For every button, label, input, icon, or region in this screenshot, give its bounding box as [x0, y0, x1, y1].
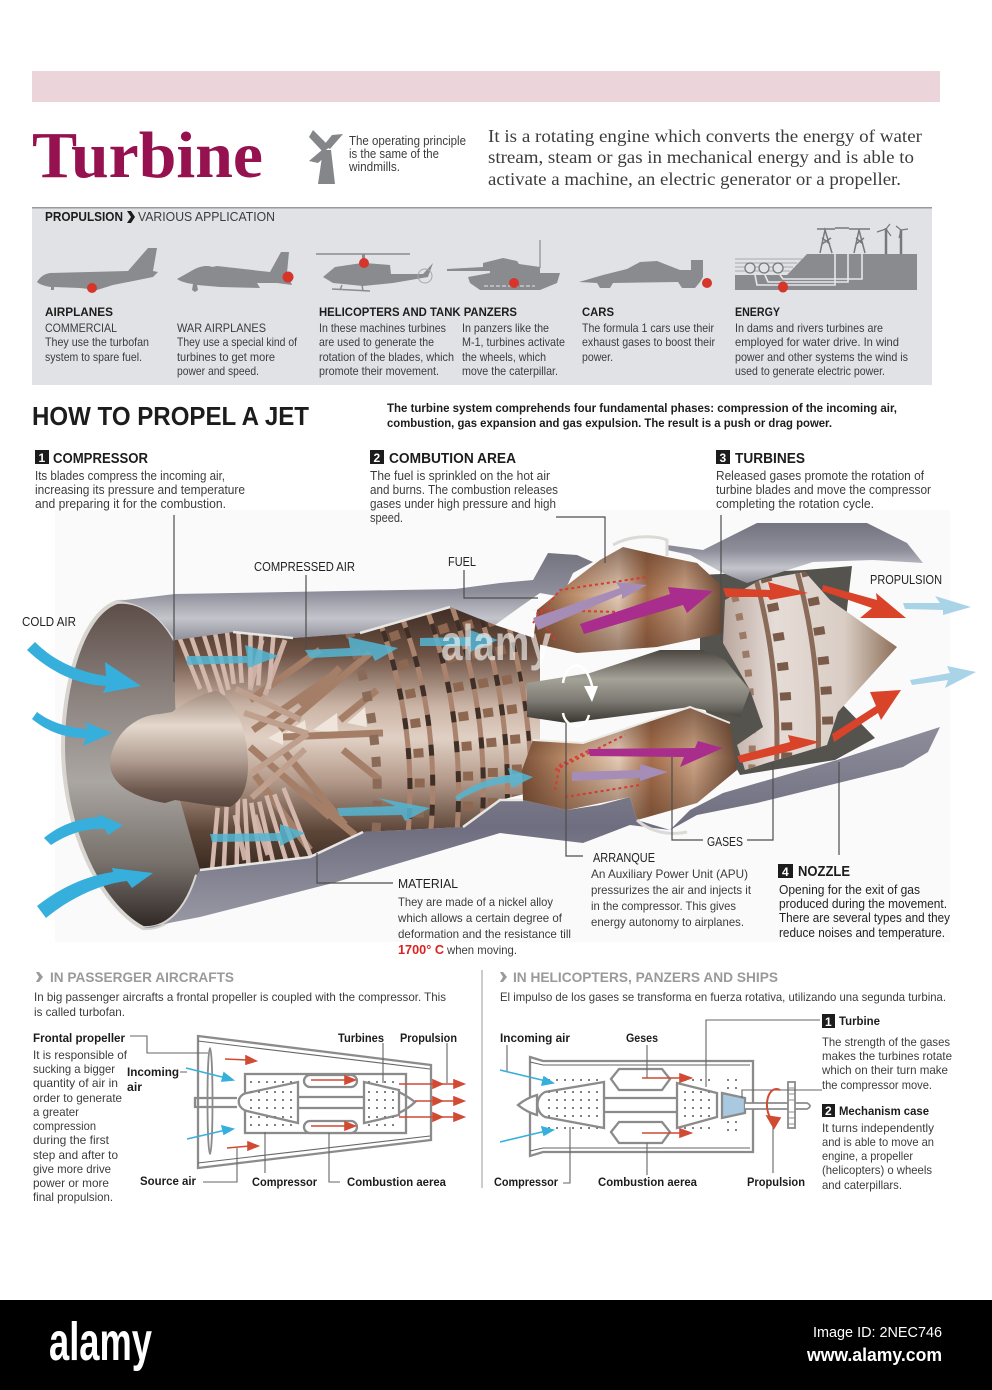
text: arranque: ARRANQUE [593, 851, 655, 865]
note 2: mechanism case: and is able to move an [822, 1135, 934, 1149]
compressor interior [175, 607, 540, 870]
panel heading [45, 209, 275, 224]
text: airplanes: COMMERCIAL [45, 321, 117, 335]
cut edge highlights [200, 607, 523, 870]
website: www.alamy.com [806, 1345, 942, 1365]
red dotted flames [533, 577, 647, 797]
label: incoming air: Incoming [127, 1065, 179, 1079]
icon: race car [579, 260, 712, 288]
blue air arrows [27, 642, 153, 918]
windmill note [348, 134, 466, 174]
step 1: compressor: increasing its pressure and temperature [35, 482, 245, 497]
front shell top [117, 553, 593, 640]
label: fuel: FUEL [448, 555, 476, 569]
note 1: turbine: the compressor move. [822, 1078, 932, 1092]
panel: propulsion applications [32, 207, 932, 385]
rear cone [723, 572, 897, 770]
text: cars: CARS [582, 305, 614, 319]
note 1: turbine: makes the turbines rotate [822, 1049, 952, 1063]
pale purple arrows [533, 582, 668, 781]
step 4: nozzle: Opening for the exit of gas [779, 882, 920, 897]
text: arranque: energy autonomy to airplanes. [591, 915, 744, 929]
note 2: mechanism case: engine, a propeller [822, 1149, 913, 1163]
icon: war plane [177, 252, 294, 292]
leaders [130, 1036, 447, 1182]
engine illustration [27, 509, 976, 942]
central shaft [527, 650, 750, 723]
text: airplanes: They use the turbofan [45, 335, 149, 349]
step 1: compressor [35, 450, 245, 511]
note 2: mechanism case [822, 1104, 934, 1192]
footer logo: alamy [49, 1312, 152, 1372]
rotation arrow [563, 665, 598, 726]
label: gases: GASES [707, 835, 743, 849]
text: turboshaft intro: El impulso de los gases se transforma en fuerza rotativa, utilizando una segunda turbina. [500, 990, 946, 1004]
step 2: combustion area [370, 450, 558, 525]
step 1: compressor: 1 [38, 451, 46, 465]
text: energy: In dams and rivers turbines are [735, 321, 883, 335]
vertical divider [481, 970, 483, 1188]
text: frontal propeller: compression [33, 1119, 96, 1133]
note 2: mechanism case: 2 [825, 1104, 832, 1118]
label: compressed air: COMPRESSED AIR [254, 560, 355, 574]
text: frontal propeller: a greater [33, 1105, 79, 1119]
text: helicopters and tank panzers: move the caterpillar. [462, 364, 558, 378]
label: combustion area: Combustion aerea [598, 1175, 697, 1189]
label: geses: Geses [626, 1031, 658, 1045]
note 1: turbine: Turbine [839, 1014, 880, 1028]
combustion chamber top [533, 547, 723, 653]
text: cars [582, 305, 715, 364]
compressor air arrows [187, 630, 533, 846]
text: frontal propeller: power or more [33, 1176, 109, 1190]
step 4: nozzle: 4 [782, 865, 789, 879]
icon: helicopter [316, 254, 433, 291]
text: frontal propeller [33, 1031, 128, 1204]
icon: windmill [309, 130, 343, 184]
panel heading: VARIOUS APPLICATION [138, 209, 275, 224]
step 2: combustion area: speed. [370, 510, 403, 525]
front shell bottom [143, 727, 940, 928]
panel heading: PROPULSION [45, 209, 123, 224]
label: compressor: Compressor [252, 1175, 317, 1189]
text: war airplanes: They use a special kind of [177, 335, 298, 349]
step 2: combustion area: and burns. The combustion releases [370, 482, 558, 497]
text: frontal propeller: during the first [33, 1133, 110, 1147]
step 3: turbines: Released gases promote the rotation of [716, 468, 924, 483]
step 2: combustion area: 2 [374, 451, 380, 465]
text: helicopters and tank panzers: In these machines turbines [319, 321, 446, 335]
note 2: mechanism case: (helicopters) o wheels [822, 1163, 932, 1177]
windmill note: windmills. [348, 160, 400, 174]
text: energy: used to generate electric power. [735, 364, 885, 378]
diagram: turbofan [130, 1036, 464, 1182]
text: arranque: in the compressor. This gives [591, 899, 736, 913]
blue arrows [500, 1070, 553, 1142]
callout lines [174, 515, 839, 883]
label: propulsion: Propulsion [400, 1031, 457, 1045]
light triangles [268, 707, 367, 745]
step 2: combustion area: COMBUTION AREA [389, 451, 517, 467]
text: war airplanes: turbines to get more [177, 350, 275, 364]
text: material: MATERIAL [398, 877, 458, 891]
intro: four phases [387, 401, 897, 430]
title: Turbine [32, 119, 263, 192]
note 1: turbine: which on their turn make [821, 1063, 948, 1077]
step 3: turbines: completing the rotation cycle. [716, 496, 874, 511]
step 2: combustion area: gases under high pressure and high [370, 496, 556, 511]
text: helicopters and tank panzers: are used to generate the [319, 335, 434, 349]
text: frontal propeller: final propulsion. [33, 1190, 113, 1204]
red arrows [225, 1056, 464, 1150]
step 1: compressor: and preparing it for the combustion. [35, 496, 226, 511]
text: arranque: An Auxiliary Power Unit (APU) [591, 867, 748, 881]
text: energy: employed for water drive. In wind [735, 335, 899, 349]
text: helicopters and tank panzers: promote their movement. [319, 364, 439, 378]
text: turbofan intro [34, 990, 446, 1019]
inlet interior [63, 602, 215, 928]
text: airplanes [45, 305, 149, 364]
text: arranque: pressurizes the air and injects it [591, 883, 752, 897]
note 1: turbine: The strength of the gases [822, 1035, 950, 1049]
intro paragraph: stream, steam or gas in mechanical energy and is able to [488, 147, 914, 167]
text: war airplanes [177, 321, 298, 378]
text: energy: ENERGY [735, 305, 780, 319]
text: helicopters and tank panzers: rotation of the blades, which [319, 350, 454, 364]
windmill note: is the same of the [349, 147, 439, 161]
image id: Image ID: 2NEC746 [813, 1324, 942, 1341]
icon: tank [447, 240, 560, 290]
step 3: turbines [716, 450, 932, 511]
icon: airliner [37, 248, 158, 293]
inlet rim [63, 602, 197, 928]
blue arrows [186, 1068, 233, 1139]
diagram: turboshaft [500, 1020, 822, 1183]
text: helicopters and tank panzers [319, 305, 565, 378]
red arrows [642, 1074, 780, 1137]
text: material: deformation and the resistance till [398, 927, 571, 941]
label: incoming air: air [127, 1080, 142, 1094]
text: airplanes: system to spare fuel. [45, 350, 142, 364]
text: arranque [591, 851, 752, 929]
text: turbofan intro: is called turbofan. [34, 1005, 125, 1019]
step 1: compressor: COMPRESSOR [53, 451, 148, 467]
exhaust interior [700, 566, 875, 775]
label: cold air: COLD AIR [22, 615, 76, 629]
compressor blades [178, 607, 532, 868]
text: war airplanes: WAR AIRPLANES [177, 321, 266, 335]
text: frontal propeller: order to generate [33, 1091, 122, 1105]
step 3: turbines: 3 [720, 451, 726, 465]
step 4: nozzle [778, 864, 950, 940]
intro: four phases: combustion, gas expansion and gas expulsion. The result is a push or drag power. [387, 416, 832, 430]
text: frontal propeller: give more drive [33, 1162, 111, 1176]
shell rim rings [613, 537, 687, 834]
chamber edge highlight [533, 707, 730, 743]
step 4: nozzle: produced during the movement. [779, 896, 947, 911]
label: propulsion: PROPULSION [870, 573, 942, 587]
intro: four phases: The turbine system comprehends four fundamental phases: compression of the incoming air, [387, 401, 897, 415]
text: material: 1700° C [398, 942, 445, 957]
text: cars: power. [582, 350, 613, 364]
red exhaust arrows [723, 582, 906, 763]
step 3: turbines: turbine blades and move the compressor [716, 482, 932, 497]
label: turbines: Turbines [338, 1031, 384, 1045]
step 4: nozzle: There are several types and they [779, 910, 950, 925]
text: frontal propeller: quantity of air in [33, 1076, 118, 1090]
text: frontal propeller: Frontal propeller [33, 1031, 125, 1045]
note 2: mechanism case: and caterpillars. [822, 1178, 902, 1192]
text: cars: exhaust gases to boost their [582, 335, 715, 349]
footer bar [0, 1300, 992, 1390]
text: material: when moving. [446, 943, 517, 957]
step 3: turbines: TURBINES [735, 451, 805, 467]
text: frontal propeller: step and after to [33, 1148, 118, 1162]
combustion chamber bottom [522, 707, 737, 820]
label: combustion area: Combustion aerea [347, 1175, 446, 1189]
intro paragraph: It is a rotating engine which converts the energy of water [488, 126, 922, 146]
text: airplanes: AIRPLANES [45, 305, 113, 319]
text: frontal propeller: sucking a bigger [33, 1062, 115, 1076]
note 1: turbine: 1 [825, 1015, 832, 1029]
label: incoming air [127, 1065, 179, 1094]
text: cars: The formula 1 cars use their [582, 321, 714, 335]
text: material: They are made of a nickel alloy [398, 895, 553, 909]
heading: how to propel a jet: HOW TO PROPEL A JET [32, 401, 309, 431]
step 4: nozzle: reduce noises and temperature. [779, 925, 945, 940]
text: helicopters and tank panzers: the wheels, which [462, 350, 546, 364]
leaders [507, 1020, 822, 1183]
watermark: alamy [441, 615, 551, 671]
label: incoming air: Incoming air [500, 1031, 570, 1045]
text: material [397, 877, 571, 957]
text: war airplanes: power and speed. [177, 364, 259, 378]
pale blue exhaust arrows [903, 596, 976, 688]
magenta arrows [580, 587, 723, 767]
intro paragraph: activate a machine, an electric generator or a propeller. [488, 169, 901, 189]
label: source air: Source air [140, 1174, 196, 1188]
text: frontal propeller: It is responsible of [33, 1048, 128, 1062]
note 2: mechanism case: Mechanism case [839, 1104, 929, 1118]
heading: in passenger aircrafts: IN PASSERGER AIRCRAFTS [50, 969, 234, 985]
text: helicopters and tank panzers: In panzers like the [462, 321, 549, 335]
note 2: mechanism case: It turns independently [822, 1121, 934, 1135]
windmill note: The operating principle [349, 134, 466, 148]
step 1: compressor: Its blades compress the incoming air, [35, 468, 225, 483]
note 1: turbine [821, 1014, 952, 1092]
text: helicopters and tank panzers: M-1, turbines activate [462, 335, 565, 349]
label: compressor: Compressor [494, 1175, 558, 1189]
step 2: combustion area: The fuel is sprinkled on the hot air [370, 468, 551, 483]
text: energy [735, 305, 908, 378]
nose cone [110, 691, 248, 807]
text: helicopters and tank panzers: HELICOPTERS AND TANK PANZERS [319, 305, 517, 319]
text: material: which allows a certain degree of [397, 911, 563, 925]
text: turbofan intro: In big passenger aircrafts a frontal propeller is coupled with the compressor. This [34, 990, 446, 1004]
turbine blades [731, 572, 834, 769]
rear cowl top [667, 523, 923, 583]
step 4: nozzle: NOZZLE [798, 864, 850, 880]
text: energy: power and other systems the wind is [735, 350, 908, 364]
intro paragraph [488, 126, 922, 189]
icon: energy plant [735, 224, 917, 292]
heading: in helicopters, panzers and ships: IN HELICOPTERS, PANZERS AND SHIPS [513, 969, 778, 985]
lattice blades [250, 650, 383, 850]
pink header band [32, 71, 940, 102]
label: propulsion: Propulsion [747, 1175, 805, 1189]
